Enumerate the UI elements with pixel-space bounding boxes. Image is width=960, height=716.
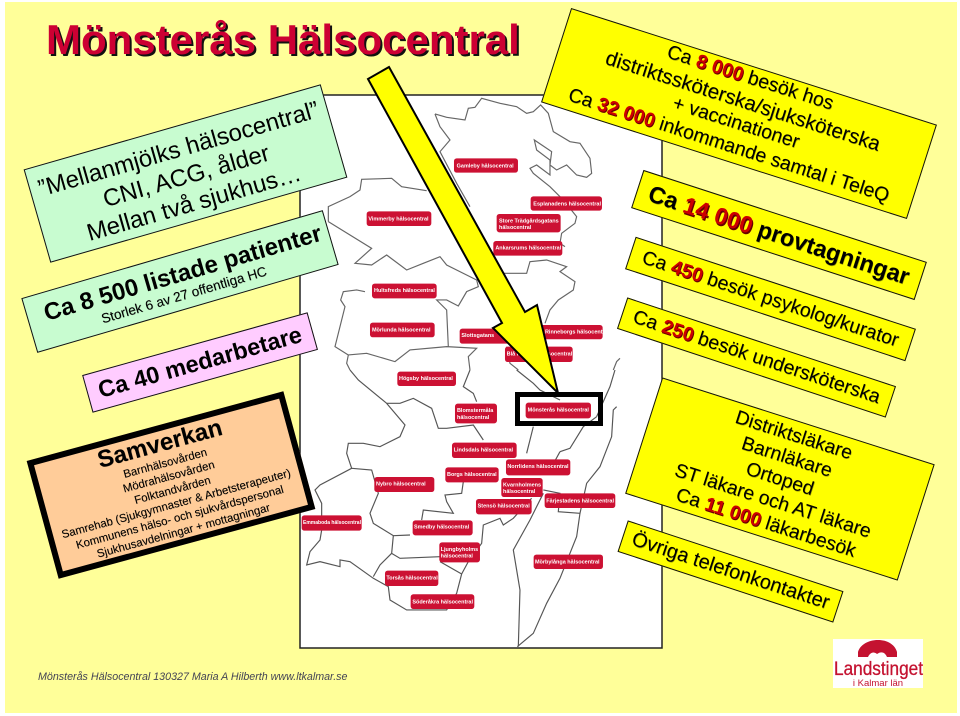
panel: Samverkan: [27, 391, 315, 578]
panel: psykolog/kurator: Ca 450 besök psykolog/kurator: [639, 246, 901, 351]
health centre labels north: Store Trädgårdsgatans: [499, 217, 559, 224]
panel: besök sjuksköterska: [541, 8, 937, 219]
panel: läkare: [625, 377, 935, 580]
logo: Landstinget i Kalmar län: i Kalmar län: [853, 678, 903, 689]
health centre labels south: Borgs hälsocentral: [447, 472, 497, 478]
health centre labels south: hälsocentral: [457, 415, 490, 421]
health centre labels south: Lindsdals hälsocentral: [454, 447, 514, 453]
panel: Mellanmjölks: [23, 84, 347, 263]
title: Mönsterås Hälsocentral: [46, 16, 520, 63]
health centre labels south: Mönsterås hälsocentral: [528, 407, 589, 414]
panel: Mellanmjölks: CNI, ACG, ålder: [99, 139, 272, 213]
health centre labels south: Emmaboda hälsocentral: [303, 520, 361, 526]
panel: läkare: Distriktsläkare: [732, 406, 855, 464]
health centre labels south: Norrlidens hälsocentral: [507, 464, 569, 470]
panel: telefonkontakter: Övriga telefonkontakter: [629, 528, 832, 613]
panel: medarbetare: Ca 40 medarbetare: [95, 321, 305, 402]
health centre labels north: Rinneborgs hälsocentral: [545, 330, 610, 336]
health centre labels south: Stensö hälsocentral: [478, 504, 530, 510]
panel: listade patienter: [21, 210, 339, 352]
panel: läkare: Ca 11 000 läkarbesök: [673, 484, 859, 562]
panel: Samverkan: Kommunens hälso- och sjukvårdspersonal: [75, 483, 285, 551]
panel: Mellanmjölks: Mellan två sjukhus…: [83, 159, 304, 246]
panel: listade patienter: Storlek 6 av 27 offentliga HC: [99, 263, 268, 325]
health centre labels north: Blå Kustens hälsocentral: [507, 350, 573, 357]
panel: besök sjuksköterska: Ca 32 000 inkommande samtal i TeleQ: [566, 83, 892, 206]
panel: läkare: Barnläkare: [739, 432, 835, 482]
panel: läkare: ST läkare och AT läkare: [672, 459, 874, 542]
map outlines north: [328, 98, 620, 370]
health centre labels south: Smedby hälsocentral: [414, 525, 470, 531]
panel: Samverkan: Samrehab (Sjukgymnaster & Arbetsterapeuter): [60, 467, 292, 541]
panel: Samverkan: Barnhälsovården: [122, 446, 208, 480]
health centre labels north: hälsocentral: [499, 225, 532, 231]
health centre labels south: Kvarnholmens: [503, 482, 541, 488]
health centre labels north: Mörlunda hälsocentral: [372, 327, 431, 333]
panel: Samverkan: Mödrahälsovården: [122, 459, 216, 495]
health centre labels south: Nybro hälsocentral: [376, 482, 426, 488]
panel: Samverkan: Samverkan: [95, 414, 225, 473]
health centre labels south: hälsocentral: [441, 554, 473, 560]
panel: besök sjuksköterska: Ca 8 000 besök hos: [664, 41, 836, 115]
panel: Mellanmjölks: ”Mellanmjölks hälsocentral”: [34, 96, 321, 202]
health centre labels north: Esplanadens hälsocentral: [533, 201, 601, 207]
panel: Samverkan: Folktandvården: [133, 474, 212, 506]
logo: Landstinget i Kalmar län: Landstinget: [834, 659, 924, 680]
footer text: Mönsterås Hälsocentral 130327 Maria A Hilberth www.ltkalmar.se: [38, 671, 347, 683]
health centre labels north: [367, 158, 610, 362]
map outlines south: [307, 370, 617, 647]
panel: provtagningar: Ca 14 000 provtagningar: [645, 180, 913, 289]
health centre labels south: Söderåkra hälsocentral: [412, 599, 473, 606]
health centre labels north: Hultsfreds hälsocentral: [374, 288, 435, 294]
panel: listade patienter: Ca 8 500 listade patienter: [41, 219, 325, 326]
health centre labels south: Högsby hälsocentral: [399, 376, 453, 382]
health centre labels south: hälsocentral: [503, 489, 536, 495]
panel: besök sjuksköterska: + vaccinationer: [670, 92, 802, 153]
health centre labels south: Färjestadens hälsocentral: [546, 498, 614, 504]
health centre labels south: Ljungbyholms: [441, 547, 478, 553]
health centre labels north: Ankarsrums hälsocentral: [495, 246, 562, 252]
health centre labels north: Gamleby hälsocentral: [457, 163, 514, 169]
health centre labels south: Torsås hälsocentral: [386, 574, 438, 581]
panel: Samverkan: Sjukhusavdelningar + mottagningar: [96, 502, 271, 560]
health centre labels south: Mörbylånga hälsocentral: [535, 558, 600, 565]
health centre labels north: Slottsgatans: [461, 333, 494, 339]
panel: besök sjuksköterska: distriktssköterska/sjuksköterska: [603, 46, 883, 155]
health centre labels north: Vimmerby hälsocentral: [368, 217, 429, 223]
panel: läkare: Ortoped: [743, 458, 817, 500]
panel: undersköterska: Ca 250 besök undersköterska: [630, 306, 883, 408]
health centre labels south: [302, 372, 615, 609]
health centre labels south: Blomstermåla: [457, 407, 494, 414]
